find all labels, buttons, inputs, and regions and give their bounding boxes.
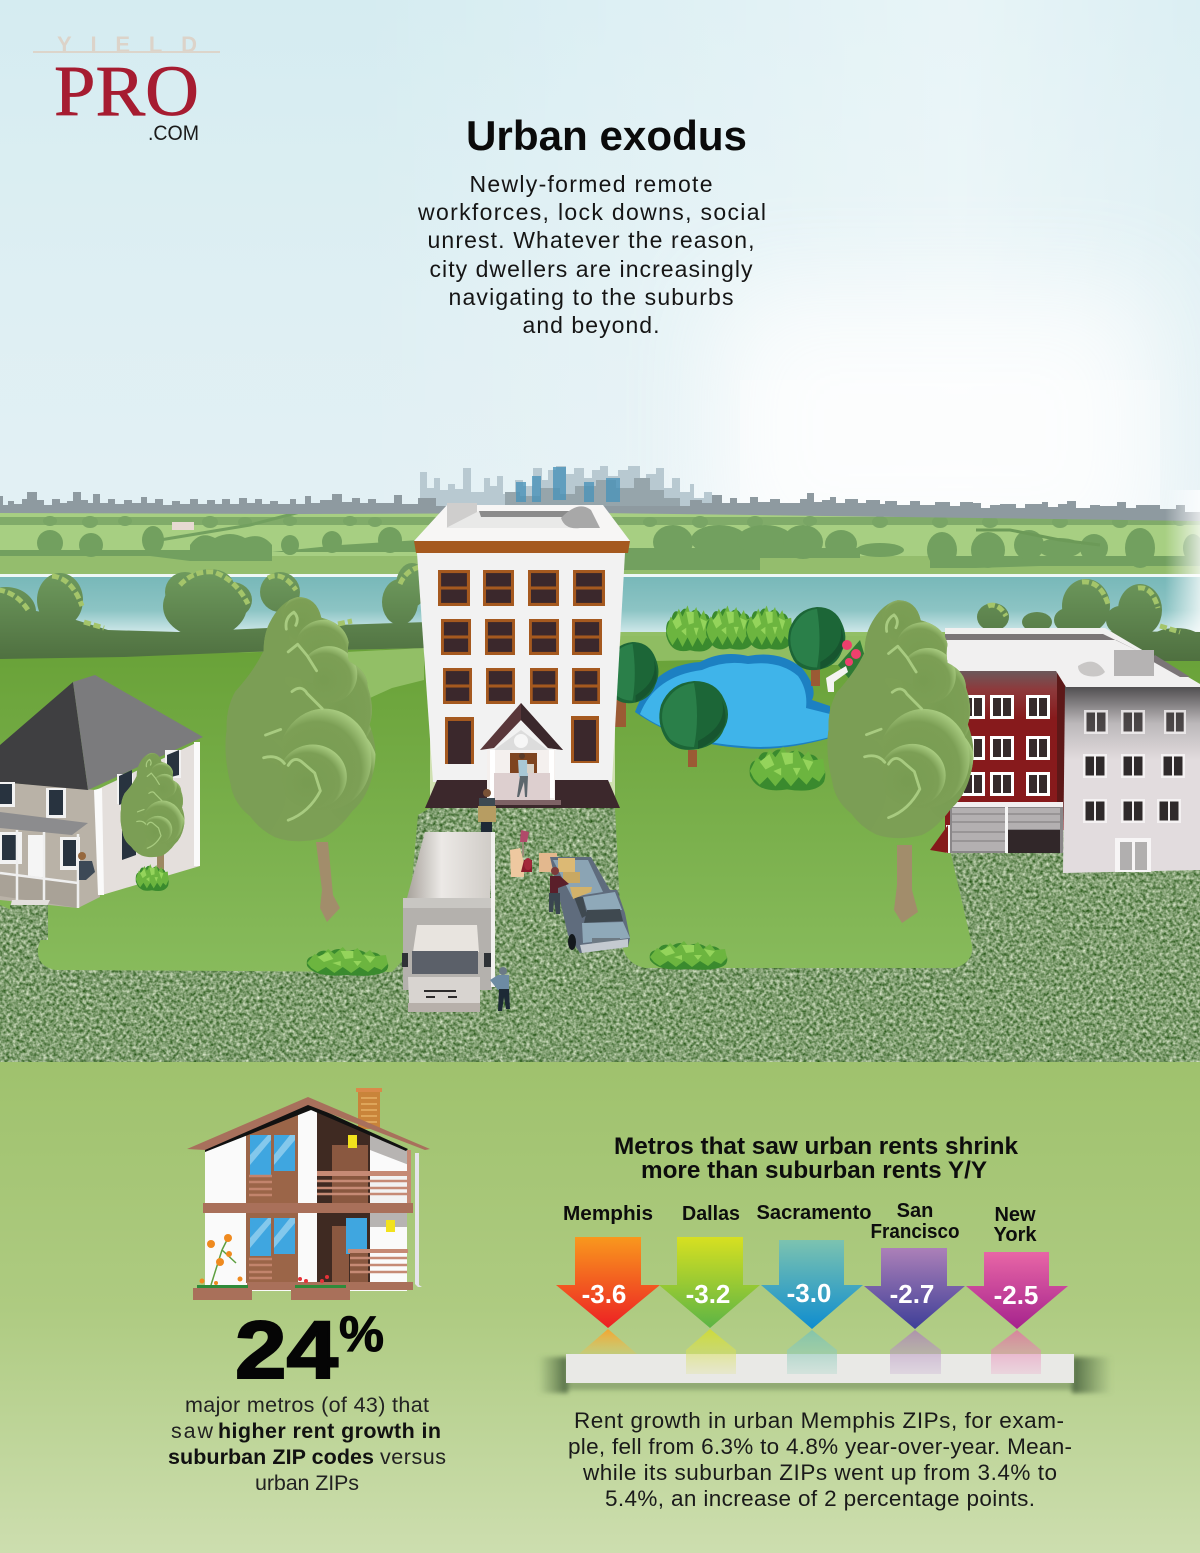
arrow: New York -2.5: New: [994, 1204, 1036, 1226]
hedge behind right side of river: [950, 579, 1200, 661]
intro paragraph: workforces, lock downs, social: [417, 199, 766, 225]
moving truck: [402, 832, 495, 1012]
person guiding truck: [490, 967, 510, 1011]
flowers and white bench: [826, 640, 866, 692]
arrow: New York -2.5: -2.5: [994, 1280, 1038, 1310]
distant city skyline: [0, 466, 1200, 521]
stat: 24 percent: 24: [235, 1305, 338, 1396]
person loading pickup: [549, 867, 569, 914]
intro paragraph: [417, 171, 766, 338]
intro paragraph: unrest. Whatever the reason,: [428, 227, 754, 253]
river: [0, 490, 1200, 637]
chart explanatory text: [568, 1408, 1072, 1511]
bush at house corner: [136, 864, 169, 891]
chart heading: Metros that saw urban rents shrink: [614, 1133, 1019, 1160]
title: Urban exodus: [466, 112, 747, 159]
intro paragraph: Newly-formed remote: [470, 171, 712, 197]
household furniture pile: [510, 830, 557, 877]
arrow: Dallas -3.2: -3.2: [686, 1279, 730, 1309]
tree: front of pond: [659, 681, 728, 767]
chart explanatory text: Rent growth in urban Memphis ZIPs, for exam-: [574, 1408, 1064, 1433]
arrow: Memphis -3.6: Memphis: [563, 1203, 653, 1225]
arrow: New York -2.5: York: [994, 1224, 1037, 1246]
grey apartment block: [1063, 686, 1200, 873]
logo: Yield Pro: .COM: [148, 122, 199, 145]
lawn and gravel ground: [0, 632, 1200, 1062]
small tree in front of house: [119, 751, 186, 874]
intro paragraph: navigating to the suburbs: [448, 284, 734, 310]
large tree, right lawn: [824, 596, 977, 923]
chart explanatory text: ple, fell from 6.3% to 4.8% year-over-year. Mean-: [568, 1434, 1072, 1459]
bush: front left lawn: [307, 947, 388, 976]
arrow: Sacramento -3.0: -3.0: [787, 1278, 831, 1308]
arrow: San Francisco -2.7: Francisco: [870, 1221, 960, 1243]
arrow: San Francisco -2.7: San: [897, 1200, 933, 1222]
sky background: [0, 0, 1200, 570]
hedge behind left side of river: [0, 563, 428, 659]
arrow: Dallas -3.2: Dallas: [682, 1203, 740, 1225]
stat description: suburban ZIP codes: [168, 1445, 374, 1469]
stat description: saw: [171, 1419, 213, 1443]
flower planters: [193, 1234, 350, 1300]
arrow: Memphis -3.6: [556, 1203, 660, 1354]
intro paragraph: and beyond.: [522, 312, 660, 338]
apartment block roof: [945, 628, 1200, 687]
large tree, left lawn: [222, 593, 379, 922]
chart explanatory text: while its suburban ZIPs went up from 3.4% to: [582, 1460, 1057, 1485]
bushes behind pond: [666, 605, 793, 652]
stat description: versus: [380, 1445, 446, 1469]
logo: Yield Pro: PRO: [54, 51, 199, 131]
arrow: Sacramento -3.0: Sacramento: [756, 1202, 872, 1224]
far fields and hedgerows: [0, 512, 1200, 576]
red apartment block: [930, 670, 1068, 853]
arrow: New York -2.5: [966, 1204, 1068, 1374]
suburban house at left: [0, 675, 203, 940]
main entrance portico: [480, 703, 563, 805]
intro paragraph: city dwellers are increasingly: [430, 256, 753, 282]
tree: beside main building: [606, 642, 658, 727]
logo: Yield Pro: [33, 32, 220, 145]
bush: right of pond: [750, 746, 825, 791]
stat description: [168, 1393, 446, 1495]
pond: [635, 654, 830, 749]
arrow: Sacramento -3.0: [756, 1202, 872, 1374]
arrow: San Francisco -2.7: -2.7: [890, 1279, 934, 1309]
stat description: higher rent growth in: [218, 1419, 441, 1443]
stat: 24 percent: %: [339, 1306, 384, 1362]
chart explanatory text: 5.4%, an increase of 2 percentage points.: [605, 1486, 1035, 1511]
arrow: Memphis -3.6: -3.6: [582, 1279, 626, 1309]
tree: rear right of pond: [788, 607, 845, 686]
logo: Yield Pro: YIELD: [57, 32, 197, 57]
pickup truck with boxes: [550, 857, 630, 953]
infographic lower panel: [0, 1062, 1200, 1553]
main apartment building: [414, 503, 630, 808]
chart shelf: [538, 1354, 1112, 1393]
icon: two-storey house: [187, 1088, 430, 1300]
bush: front right lawn: [650, 941, 727, 970]
person carrying box by entrance: [478, 789, 496, 832]
chart heading: more than suburban rents Y/Y: [641, 1157, 987, 1184]
stat description: urban ZIPs: [255, 1471, 359, 1495]
stat description: major metros (of 43) that: [185, 1393, 429, 1417]
stat: 24 percent: [235, 1305, 384, 1396]
arrow: San Francisco -2.7: [864, 1200, 965, 1374]
chart heading: [614, 1133, 1019, 1184]
person carrying box on porch: [517, 753, 534, 797]
arrow: Dallas -3.2: [659, 1203, 760, 1374]
